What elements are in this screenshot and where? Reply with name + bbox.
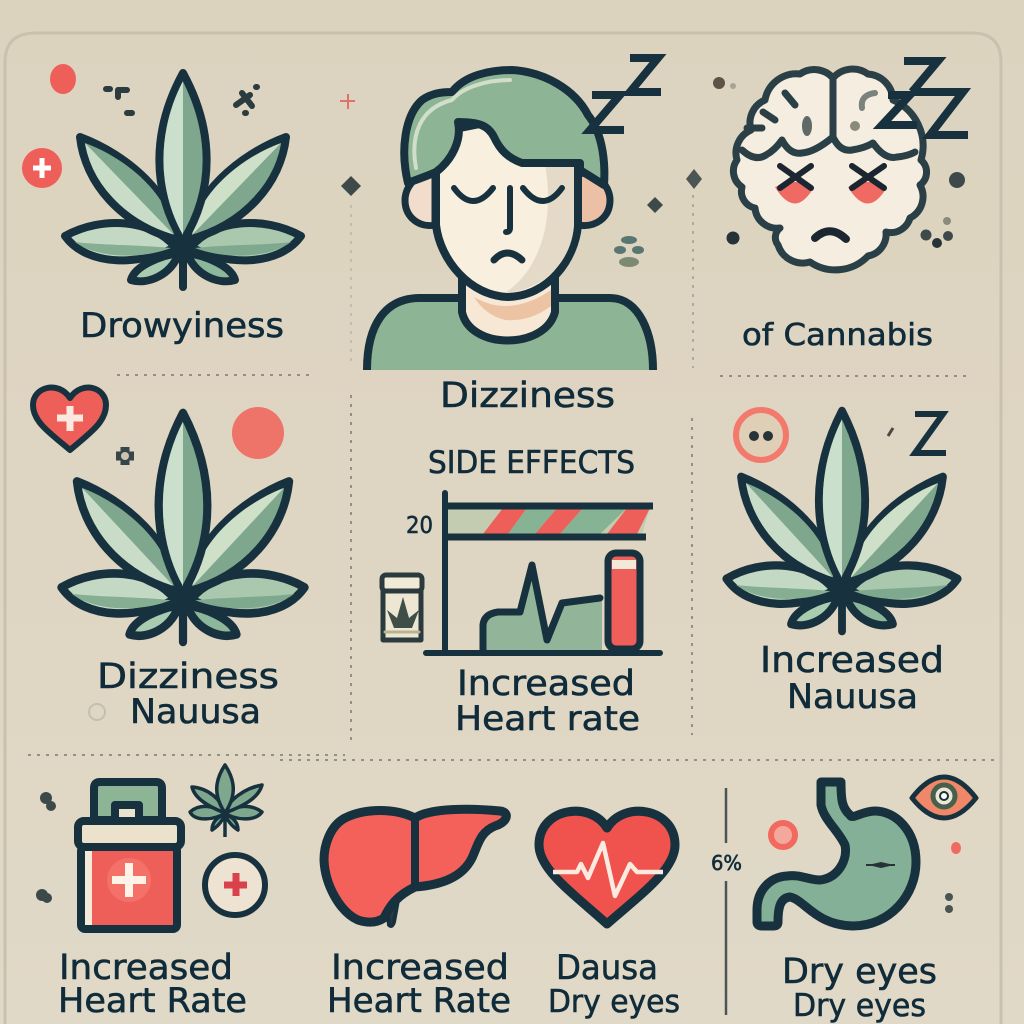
label: Drowyiness: Drowyiness: [80, 306, 284, 346]
label: Dry eyes: Dry eyes: [782, 952, 937, 992]
label: Increased Nausea right: Increased: [760, 640, 944, 681]
label: Dizziness Nausea left: Dizziness: [97, 657, 279, 697]
heading: side effects: SIDE EFFECTS: [428, 445, 635, 481]
chart: side effects heart rate: [382, 493, 660, 653]
label: Dausa Dry eyes: Dausa: [556, 948, 658, 988]
label: of Cannabis: of Cannabis: [742, 318, 933, 353]
chart: side effects heart rate: 20: [406, 513, 433, 539]
label: Dizziness Nausea left: Nauusa: [130, 692, 261, 732]
decorative marks: right of person: [614, 197, 663, 267]
label: Increased Nausea right: Nauusa: [787, 677, 918, 717]
icon: stomach: [757, 782, 916, 926]
label: Increased Heart Rate 2: [327, 948, 511, 1021]
label: Dizziness Nausea left: [97, 657, 279, 732]
icon: sleeping person: [367, 58, 661, 370]
icon: small cannabis leaf: [190, 765, 262, 837]
label: Dry eyes: [782, 952, 937, 1024]
icon: heart with plus: [33, 388, 106, 450]
label: Increased Heart Rate 1: Heart Rate: [58, 981, 247, 1021]
label: Dry eyes: Dry eyes: [793, 988, 926, 1024]
label: Dausa Dry eyes: Dry eyes: [548, 984, 680, 1020]
icon: eye: [912, 777, 976, 818]
label: Increased Heart rate center: Heart rate: [455, 699, 640, 739]
icon: liver: [324, 809, 506, 926]
label: Increased Heart rate center: Increased: [457, 664, 635, 704]
label: Increased Heart Rate 1: [58, 948, 247, 1021]
label: Increased Heart Rate 2: Increased: [331, 948, 509, 988]
label: Increased Nausea right: [760, 640, 944, 717]
label: Dizziness center: Dizziness: [440, 376, 615, 416]
label: Increased Heart rate center: [455, 664, 640, 739]
decorative marks around leaf: [22, 64, 361, 196]
dotted dividers: [28, 195, 1000, 760]
divider with percent: 6%: [711, 851, 742, 875]
decorative marks: bottle: [36, 792, 56, 903]
label: Increased Heart Rate 2: Heart Rate: [327, 981, 511, 1021]
icon: heart with pulse: [539, 811, 675, 924]
label: Dausa Dry eyes: [548, 948, 680, 1020]
icon: dizzy brain: [686, 61, 968, 270]
icon: circle and Z, middle right: [736, 410, 946, 460]
decorative marks: middle left: [89, 407, 284, 720]
icon: medicine bottle: [78, 782, 181, 929]
icon: circle with cross: [205, 855, 265, 915]
label: Increased Heart Rate 1: Increased: [59, 948, 233, 988]
icon: cannabis leaf, middle right: [726, 411, 958, 631]
icon: jar: [382, 575, 422, 640]
icon: cannabis leaf, top left: [22, 64, 361, 287]
icon: cannabis leaf, middle left: [61, 413, 305, 642]
decorative marks: right of stomach: [771, 823, 961, 913]
